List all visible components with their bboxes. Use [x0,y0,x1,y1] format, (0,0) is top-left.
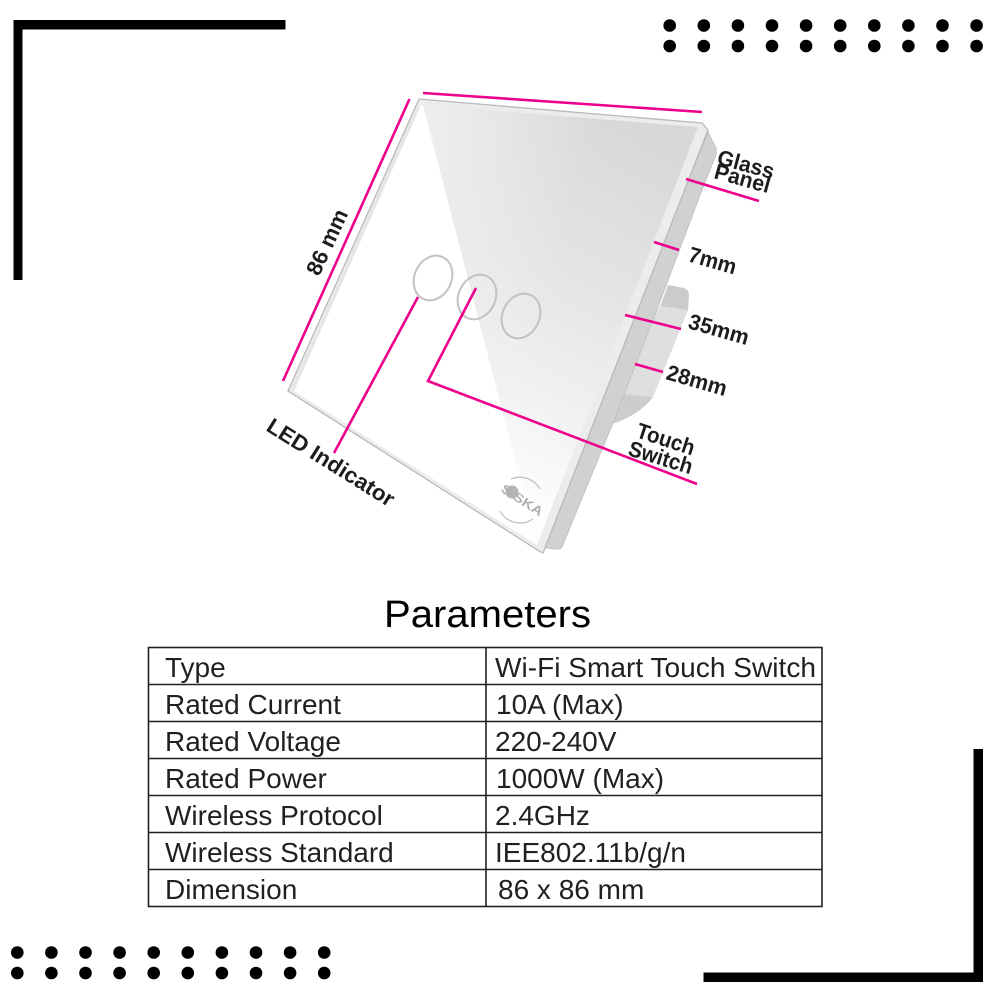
touch switch leader [428,288,697,484]
row: Dimension: 86 x 86 mm [498,874,644,905]
label: LED Indicator: LED Indicator [262,413,400,512]
row: Wireless Protocol: 2.4GHz [495,800,590,831]
row: Rated Current [165,689,624,720]
label: 7mm: 7mm [686,242,740,279]
SOSKA logo [498,477,547,523]
row: Wireless Standard: Wireless Standard [165,837,394,868]
touch button 2 [451,268,503,326]
bottom-right corner bracket [704,749,983,982]
touch button 1 [407,249,459,307]
label: 35mm: 35mm [686,309,752,350]
label: 28mm: 28mm [664,360,730,401]
heading: Parameters: Parameters [384,594,591,636]
row: Rated Voltage: Rated Voltage [165,726,341,757]
back plate side [540,132,716,549]
row: Wireless Protocol [165,800,590,831]
row: Wireless Protocol: Wireless Protocol [165,800,383,831]
grey reflection on front face [423,105,698,545]
label: Glass Panel: Glass [715,145,777,184]
top-left corner bracket [14,20,286,280]
label: Touch Switch: Switch [626,436,696,479]
height dimension line [283,99,410,381]
row: Rated Power [165,763,664,794]
LED indicator leader [334,297,418,453]
rear module lower block [612,394,653,424]
glass panel leader [686,179,759,201]
row: Rated Current: Rated Current [165,689,341,720]
parameters table [148,648,822,906]
row: Rated Current: 10A (Max) [496,689,624,720]
label: 86 mm: 86 mm [301,205,353,279]
row: Wireless Standard: IEE802.11b/g/n [495,837,686,868]
glass panel body [288,99,708,553]
35mm leader [625,315,681,329]
table grid [148,648,822,906]
28mm leader [635,364,663,372]
top-right dot grid [663,19,983,52]
rear module middle block [622,306,688,397]
bottom-left dot grid [11,946,331,979]
row: Type: Type [165,652,226,683]
white front face [294,105,698,545]
row: Rated Power: 1000W (Max) [496,763,664,794]
SOSKA logo: S SKA [498,481,547,520]
row: Dimension [165,874,644,905]
row: Rated Voltage: 220-240V [495,726,617,757]
label: Touch Switch: Touch [633,418,698,460]
row: Rated Power: Rated Power [165,763,327,794]
switch illustration [288,99,716,553]
rear module upper block [660,285,689,311]
label: Glass Panel: Panel [712,159,773,198]
left shadow edge [291,105,421,391]
row: Type [165,652,816,683]
row: Rated Voltage [165,726,617,757]
row: Type: Wi-Fi Smart Touch Switch [495,652,816,683]
pink dimension lines [283,93,759,484]
width dimension line [423,93,702,112]
row: Dimension: Dimension [165,874,297,905]
touch button 3 [495,287,547,345]
label: Touch Switch [626,418,698,479]
top reflection highlight [423,105,698,545]
row: Wireless Standard [165,837,686,868]
7mm leader [654,242,679,250]
